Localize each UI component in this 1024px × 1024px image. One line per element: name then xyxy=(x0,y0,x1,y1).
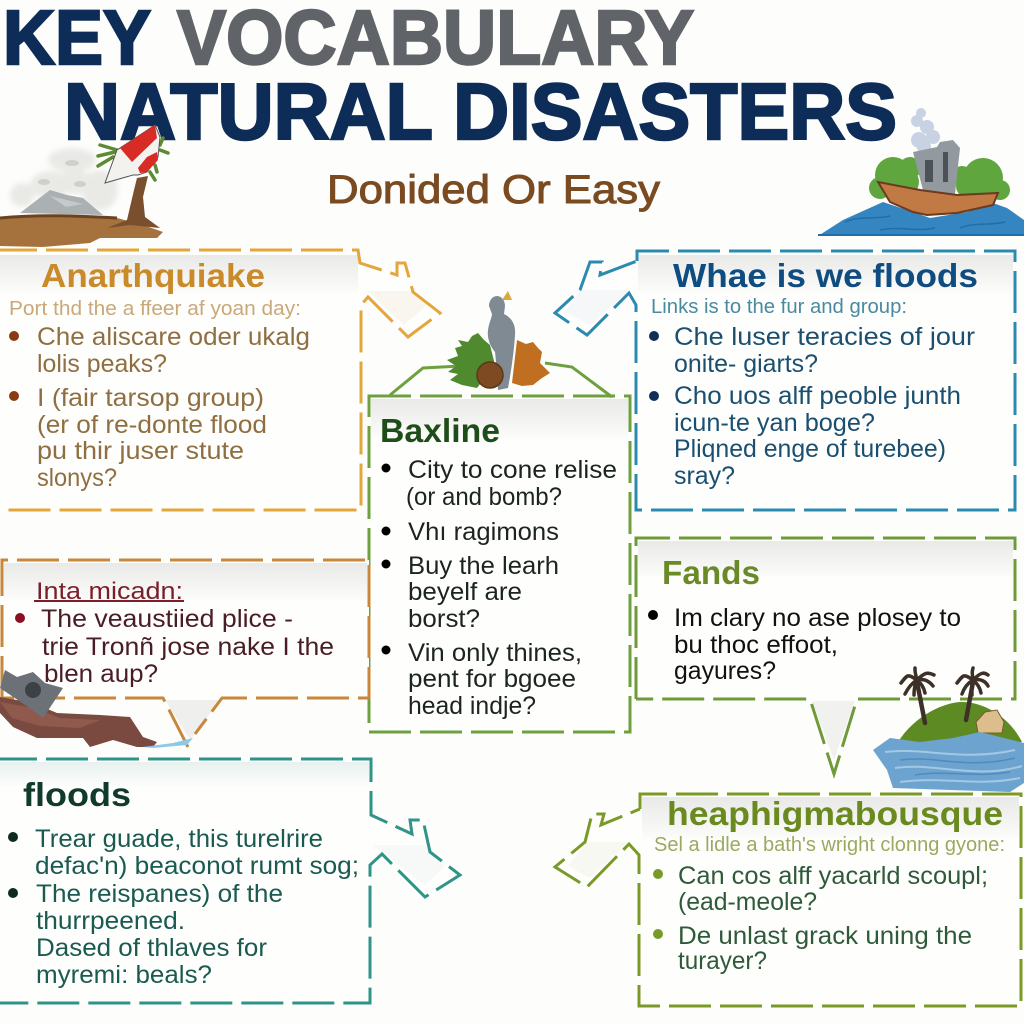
list: floods questions: icun-te yan boge? xyxy=(674,409,875,437)
list: landslide questions: trie Tronñ jose nake I the xyxy=(42,633,334,661)
list: baxline questions xyxy=(382,456,617,720)
panel: fands xyxy=(636,538,1015,774)
list: floods notes xyxy=(8,825,359,989)
heading: baxline: Baxline xyxy=(380,412,500,449)
list: baxline questions: Vin only thines, xyxy=(408,639,582,667)
panel: floods xyxy=(0,759,460,1003)
heading: earthquake: Anarthquiake xyxy=(41,257,265,294)
list: landslide questions xyxy=(15,605,334,688)
list: baxline questions: borst? xyxy=(408,605,480,633)
list: earthquake questions: I (fair tarsop group) xyxy=(37,384,264,412)
list: fands questions: gayures? xyxy=(674,657,776,685)
list: baxline questions: Buy the learh xyxy=(408,552,559,580)
subtitle: Donided Or Easy xyxy=(327,168,660,212)
text block: earthquake intro: Port thd the a ffeer af yoan day: xyxy=(9,298,301,320)
list: baxline questions: beyelf are xyxy=(408,578,522,606)
text block: floods intro: Links is to the fur and group: xyxy=(651,296,907,318)
list: earthquake questions: slonys? xyxy=(37,464,117,492)
list: floods notes: The reispanes) of the xyxy=(36,880,283,908)
list: floods notes: myremi: beals? xyxy=(36,961,212,989)
title xyxy=(3,0,897,156)
panel: landslide callout xyxy=(2,560,369,747)
list: baxline questions: Vhı ragimons xyxy=(408,518,559,546)
title: NATURAL DISASTERS xyxy=(64,67,897,156)
list: floods questions: Cho uos alff peoble junth xyxy=(674,382,961,410)
list: baxline questions: City to cone relise xyxy=(408,456,617,484)
list: landslide questions: The veaustiied plice - xyxy=(41,605,293,633)
heading: fands: Fands xyxy=(662,554,760,591)
icon: volcano and tree xyxy=(0,125,168,247)
text block: heaphigmabousque intro: Sel a lidle a bath's wright clonng gyone: xyxy=(654,834,1005,856)
list: earthquake questions xyxy=(9,323,310,492)
list: earthquake questions: lolis peaks? xyxy=(37,350,167,378)
list: heaphigmabousque questions: De unlast grack uning the xyxy=(678,922,972,950)
panel: heaphigmabousque xyxy=(555,794,1021,1006)
icon: landslide rock xyxy=(0,670,193,748)
list: floods notes: Trear guade, this turelrire xyxy=(35,825,323,853)
heading: floods: floods xyxy=(23,776,131,813)
list: fands questions xyxy=(648,604,961,685)
list: floods questions xyxy=(649,323,975,490)
icon: central statue with leaves xyxy=(447,291,550,390)
list: fands questions: Im clary no ase plosey to xyxy=(674,604,961,632)
panel: earthquake xyxy=(0,250,440,510)
list: floods questions: Che luser teracies of jour xyxy=(674,323,975,351)
panel: baxline xyxy=(369,363,630,732)
list: heaphigmabousque questions: turayer? xyxy=(678,947,767,975)
list: earthquake questions: (er of re-donte flood xyxy=(37,411,267,439)
heading: heaphigmabousque: heaphigmabousque xyxy=(667,795,1003,832)
list: baxline questions: (or and bomb? xyxy=(406,483,562,511)
list: baxline questions: pent for bgoee xyxy=(408,665,576,693)
list: floods questions: Pliqned enge of turebee) xyxy=(674,435,946,463)
icon: palm island flood xyxy=(873,668,1024,792)
heading: landslide callout: Inta micadn: xyxy=(36,578,183,605)
list: floods notes: defac'n) beaconot rumt sog; xyxy=(35,852,359,880)
panel: floods question xyxy=(555,251,1015,510)
list: heaphigmabousque questions xyxy=(653,862,988,975)
list: earthquake questions: Che aliscare oder ukalg xyxy=(37,323,310,351)
list: floods notes: Dased of thlaves for xyxy=(36,934,267,962)
list: heaphigmabousque questions: (ead-meole? xyxy=(678,888,817,916)
list: heaphigmabousque questions: Can cos alff yacarld scoupl; xyxy=(678,862,988,890)
icon: flooded boat and city xyxy=(818,108,1024,236)
list: earthquake questions: pu thir juser stute xyxy=(37,437,244,465)
list: floods questions: sray? xyxy=(674,462,735,490)
list: landslide questions: blen aup? xyxy=(44,660,158,688)
list: baxline questions: head indje? xyxy=(408,692,536,720)
list: floods notes: thurrpeened. xyxy=(36,907,185,935)
list: fands questions: bu thoc effoot, xyxy=(674,631,838,659)
heading: floods question: Whae is we floods xyxy=(673,257,978,294)
list: floods questions: onite- giarts? xyxy=(674,350,818,378)
